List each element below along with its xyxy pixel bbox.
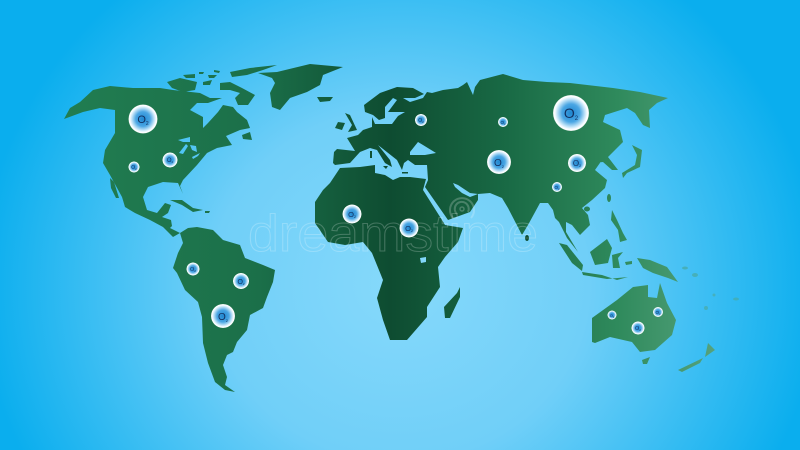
bubble: Siberia [553,95,589,131]
bubble: China [552,182,562,192]
landmass: Japan and Taiwan [584,145,642,212]
bubble: Bolivia: 2 [226,318,229,323]
bubble: Australia centre: O [635,326,639,332]
bubble: Canada [128,104,158,134]
bubble: Russia central: 2 [504,123,506,126]
bubble: West Africa: 2 [354,215,356,219]
bubble: Australia centre [632,322,644,334]
bubble: Canada: 2 [146,121,149,127]
bubble: USA west [128,162,140,172]
bubble: Brazil: O [237,279,243,286]
landmass: Tasmania [642,357,650,364]
inland waters [178,137,478,263]
bubble: Mongolia [568,154,586,172]
bubble: USA central: 2 [172,160,174,164]
bubble: West Africa [342,204,362,224]
bubble: Peru: O [190,267,194,273]
bubble: China: 2 [558,188,560,191]
bubble: Russia west [415,114,427,126]
world map [64,64,739,392]
landmass: Eurasia [333,74,668,252]
bubble: Brazil [233,273,249,289]
landmass: Pacific islands [682,266,739,310]
bubble: West Africa: O [348,210,354,219]
bubble: Mongolia: 2 [579,164,581,168]
bubble: Australia west: 2 [613,316,615,319]
landmass: Greenland [258,64,343,110]
oxygen bubbles [128,95,663,334]
bubble: Kazakhstan: O [494,158,502,169]
bubble: Australia centre: 2 [639,328,641,332]
bubble: Mongolia: O [573,159,579,168]
bubble: Kazakhstan: 2 [502,164,505,169]
bubble: Bolivia [211,304,235,328]
bubble: Australia west: O [610,313,613,318]
landmass: Great Britain and Ireland [335,113,357,132]
bubble: Russia west: 2 [422,120,424,124]
landmass: Southeast Asia islands [559,210,678,282]
bubble: USA west: 2 [135,167,137,171]
bubble: East Africa [400,218,418,238]
bubble: Siberia: O [564,105,575,121]
landmass: Africa [315,165,463,340]
bubble: China: O [555,185,558,190]
bubble: Siberia: 2 [575,116,579,122]
landmass: New Zealand [678,343,715,372]
bubble: Australia north-east [653,307,663,317]
bubble: Brazil: 2 [243,282,245,286]
bubble: Peru: 2 [194,269,196,273]
landmass: Australia [592,283,676,352]
bubble: Russia west: O [418,118,422,124]
bubble: Australia north-east: O [656,310,659,315]
bubble: Australia north-east: 2 [659,313,661,316]
landmass: North America [64,65,277,237]
bubble: Kazakhstan [487,150,511,174]
landmass: Iceland [317,97,333,102]
bubble: Australia west [608,310,616,320]
watermark: dreamstime [248,205,538,263]
bubble: East Africa: O [405,224,411,233]
bubble: East Africa: 2 [411,229,413,233]
bubble: Russia central [498,117,508,127]
landmass: Mediterranean islands [370,151,408,174]
bubble: Bolivia: O [218,312,226,323]
bubble: USA central [162,152,178,168]
bubble: USA west: O [131,165,135,171]
landmass: Sri Lanka [525,235,529,241]
bubble: Russia central: O [501,120,504,125]
landmass: Madagascar [444,287,460,318]
landmass: South America [173,227,275,392]
bubble: Peru [186,262,200,276]
bubble: USA central: O [167,158,172,164]
bubble: Canada: O [137,114,146,126]
